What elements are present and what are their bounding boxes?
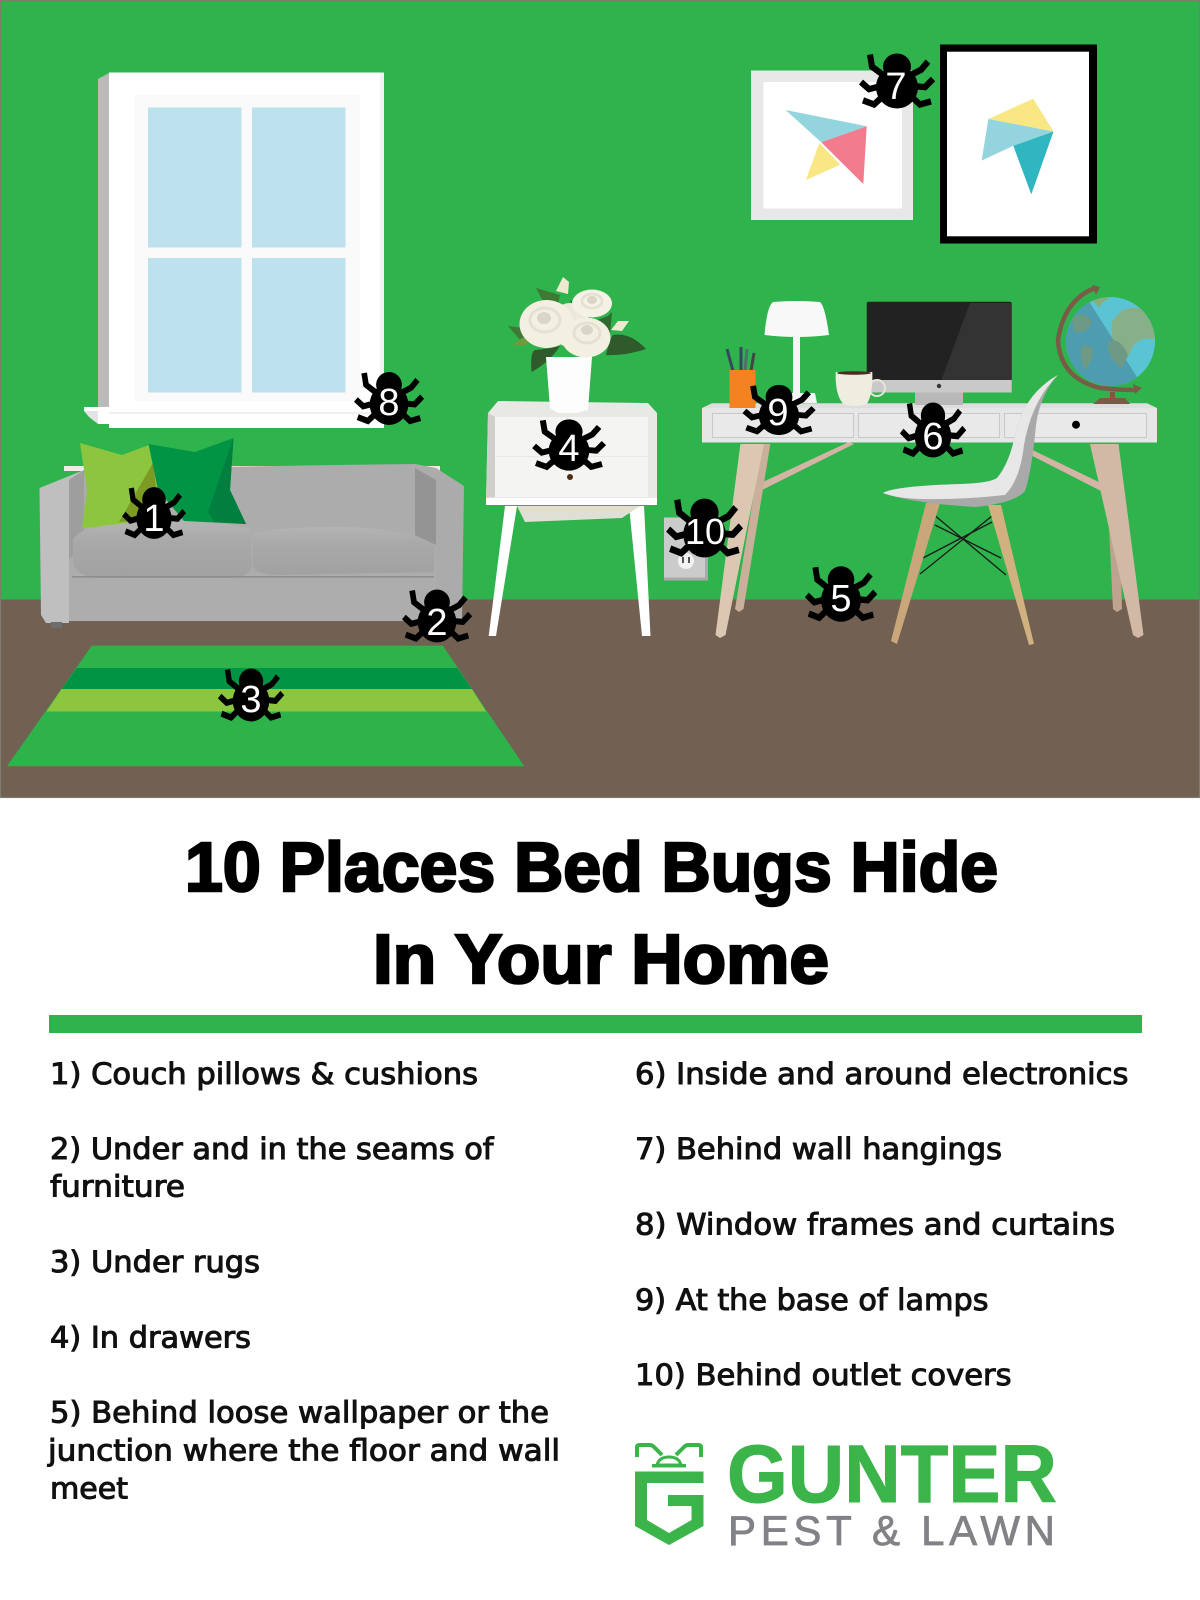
- item 9: 9) At the base of lamps: [635, 1283, 988, 1317]
- sofa: [40, 438, 464, 628]
- bug 7: 7: [885, 66, 907, 108]
- window: [84, 72, 384, 428]
- bug 10: 10: [685, 511, 725, 552]
- globe: [1058, 285, 1160, 404]
- bug 1: 1: [143, 498, 165, 540]
- bug 3: 3: [240, 679, 262, 721]
- bug 6: 6: [922, 416, 944, 458]
- item 2: [50, 1132, 494, 1204]
- bug 5: 5: [830, 578, 852, 620]
- chair: [883, 375, 1058, 645]
- monitor: [867, 302, 1012, 405]
- bug 8: 8: [378, 382, 400, 424]
- title: In Your Home: [373, 920, 829, 998]
- bug 10: [668, 499, 741, 557]
- icon: shield bug: [635, 1445, 704, 1545]
- seat cushions: [73, 521, 252, 578]
- bug 3: [220, 669, 282, 721]
- item 5: 5) Behind loose wallpaper or the: [50, 1396, 549, 1430]
- logo: Gunter Pest & Lawn: [635, 1429, 1057, 1554]
- bug 4: [534, 419, 604, 471]
- bug 8: [356, 372, 422, 425]
- title: 10 Places Bed Bugs Hide: [185, 828, 998, 906]
- bug 9: 9: [767, 392, 789, 434]
- item 6: 6) Inside and around electronics: [635, 1057, 1128, 1091]
- coffee cup: [836, 371, 885, 406]
- item 2: furniture: [50, 1170, 185, 1204]
- item 5: junction where the floor and wall: [47, 1434, 560, 1468]
- list: left column: [47, 1057, 560, 1506]
- item 3: 3) Under rugs: [50, 1245, 260, 1279]
- item 4: 4) In drawers: [50, 1320, 251, 1354]
- item 10: 10) Behind outlet covers: [635, 1358, 1012, 1392]
- wordmark: GUNTER: [727, 1429, 1057, 1520]
- green divider bar: [49, 1015, 1142, 1033]
- panel: room scene: [0, 0, 1200, 798]
- bug 1: [124, 487, 184, 540]
- bug 9: [744, 385, 814, 435]
- item 7: 7) Behind wall hangings: [635, 1132, 1002, 1166]
- title: [185, 828, 998, 998]
- bug 2: [404, 590, 470, 644]
- item 5: meet: [50, 1472, 128, 1506]
- desk legs: [716, 442, 1144, 638]
- bug 2: 2: [426, 602, 448, 644]
- item 2: 2) Under and in the seams of: [50, 1132, 494, 1166]
- rug: [7, 646, 524, 766]
- pencil cup: [727, 347, 756, 408]
- flower vase: [508, 277, 646, 413]
- bug 4: 4: [558, 428, 580, 470]
- list: right column: [635, 1057, 1128, 1392]
- item 5: [47, 1396, 560, 1506]
- item 1: 1) Couch pillows & cushions: [50, 1057, 478, 1091]
- bug 7: [861, 53, 933, 109]
- tagline: PEST & LAWN: [728, 1507, 1055, 1554]
- frame: right picture: [940, 44, 1097, 244]
- bug 6: [902, 402, 964, 458]
- side table: [486, 401, 657, 636]
- pillows: [80, 438, 246, 528]
- floor: [0, 600, 1200, 798]
- desk top: [702, 403, 1157, 442]
- item 8: 8) Window frames and curtains: [635, 1208, 1115, 1242]
- lamp: [764, 301, 829, 403]
- scene border: [0, 0, 1200, 798]
- wall: [0, 0, 1200, 600]
- frame: left picture: [751, 70, 913, 220]
- wall outlet: [664, 518, 708, 580]
- bug 5: [807, 566, 875, 622]
